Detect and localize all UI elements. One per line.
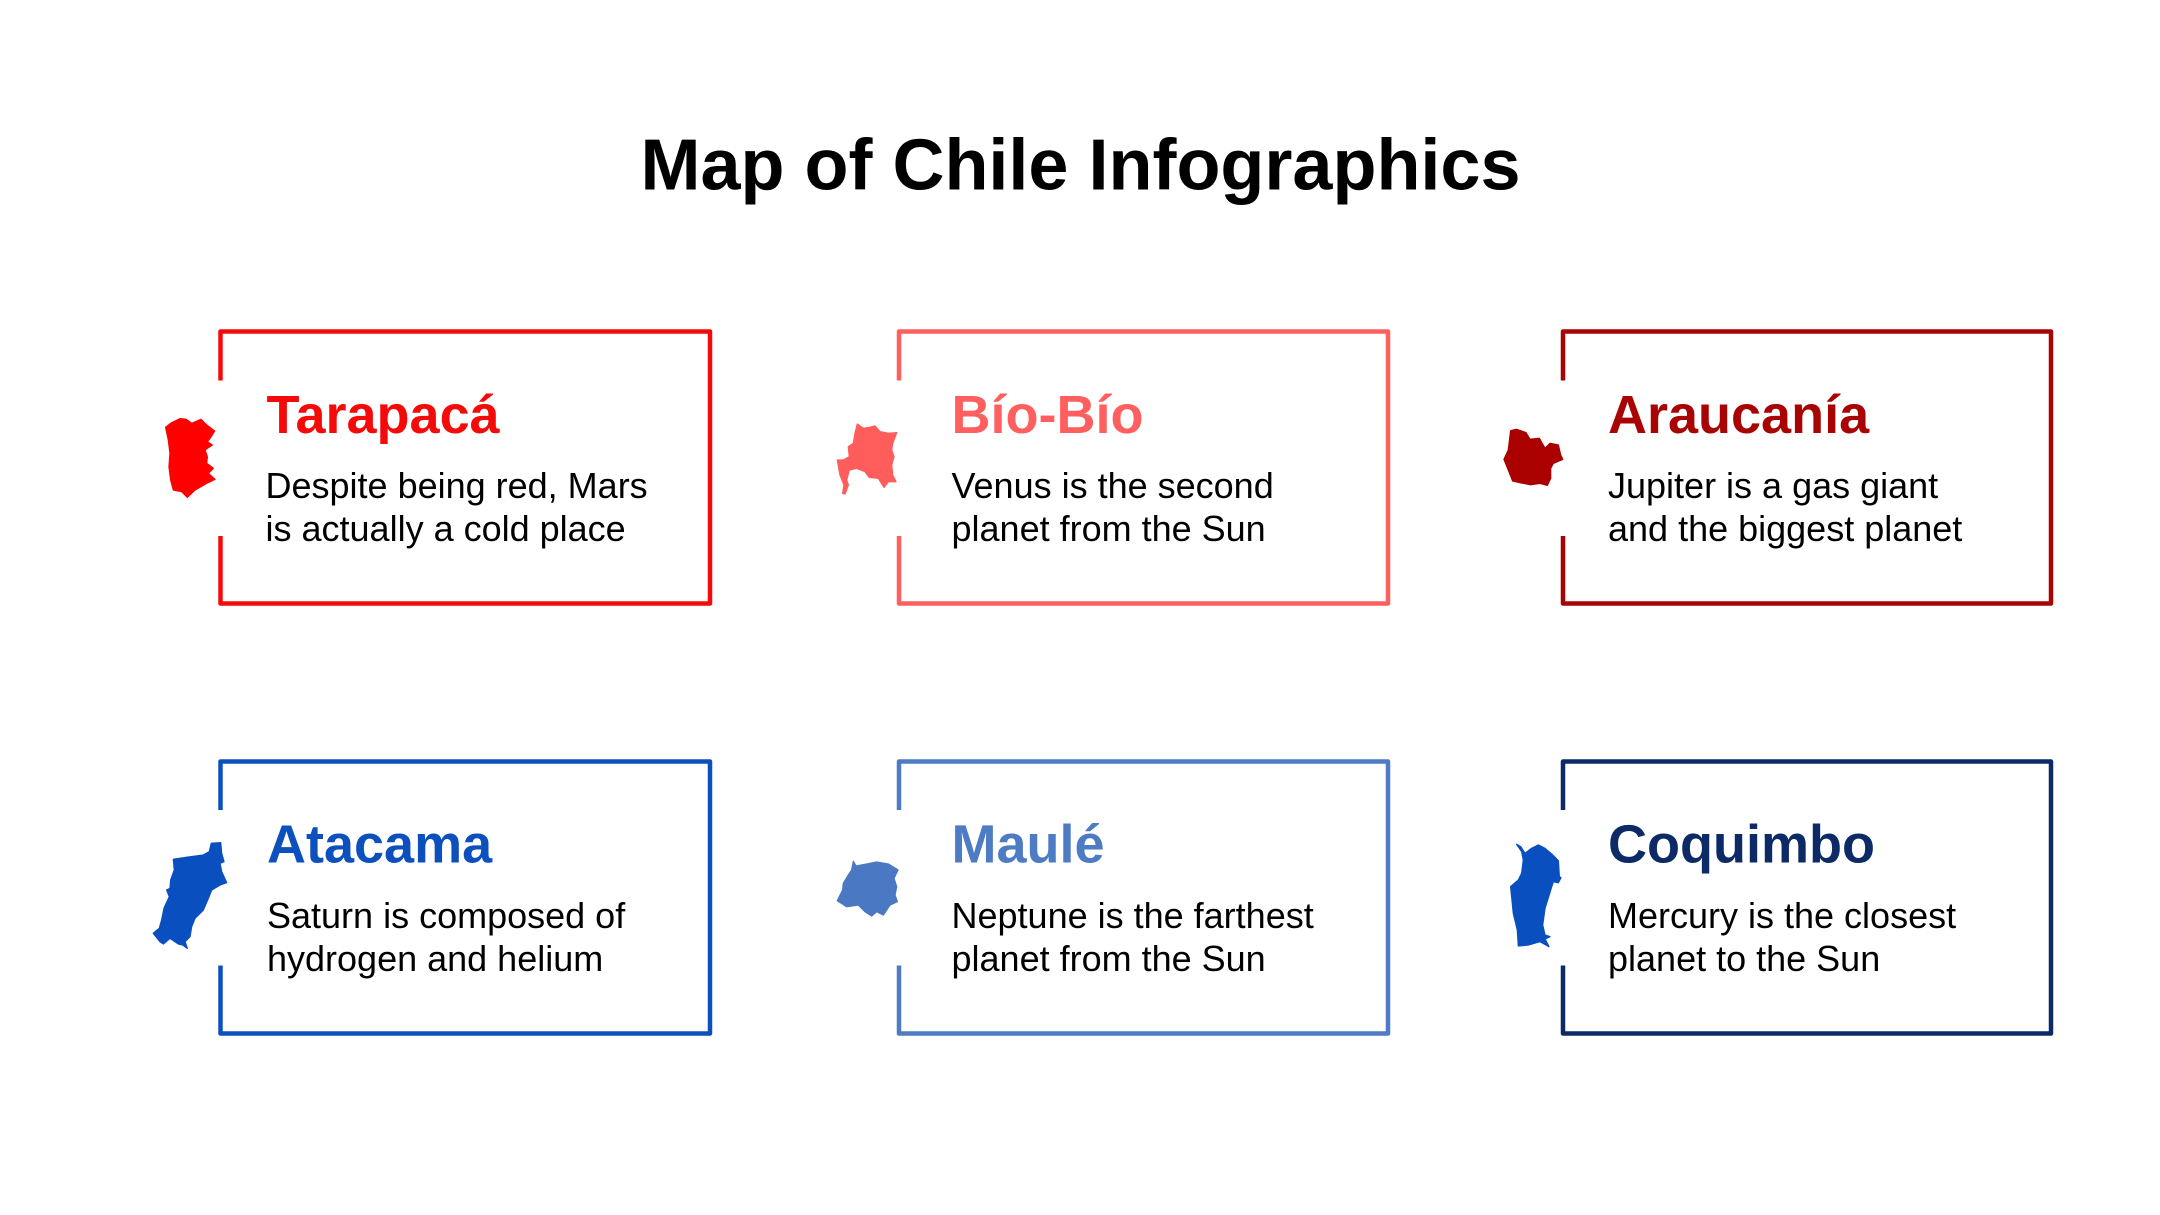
card outline xyxy=(899,332,1388,604)
body text: Saturn is composed of xyxy=(267,895,626,936)
body text line 2: planet from the Sun xyxy=(952,508,1266,549)
icon: Bío-Bío region map xyxy=(837,424,897,494)
card outline xyxy=(220,762,710,1034)
body text: Mercury is the closest xyxy=(1608,895,1956,936)
panel: Atacama xyxy=(153,762,710,1034)
body text line 2: is actually a cold place xyxy=(266,508,626,549)
heading: Araucanía xyxy=(1608,385,1870,445)
heading: Tarapacá xyxy=(266,385,501,445)
heading: Coquimbo xyxy=(1608,814,1875,874)
card outline xyxy=(220,332,710,604)
panel: Bío-Bío xyxy=(837,332,1388,604)
body text: Venus is the second xyxy=(952,465,1274,506)
body text line 2: planet to the Sun xyxy=(1608,938,1880,979)
body text: Neptune is the farthest xyxy=(952,895,1314,936)
card outline xyxy=(1563,762,2051,1034)
icon: Maulé region map xyxy=(837,861,898,916)
body text: Jupiter is a gas giant xyxy=(1608,465,1938,506)
panel: Maulé xyxy=(837,762,1388,1034)
icon: Coquimbo region map xyxy=(1511,844,1561,947)
card outline xyxy=(899,762,1388,1034)
panel: Coquimbo xyxy=(1511,762,2051,1034)
icon: Tarapacá region map xyxy=(166,419,215,497)
heading: Bío-Bío xyxy=(952,385,1143,445)
heading: Atacama xyxy=(267,814,493,874)
card outline xyxy=(1563,332,2051,604)
body text line 2: hydrogen and helium xyxy=(267,938,603,979)
icon: Atacama region map xyxy=(153,843,227,948)
body text line 2: and the biggest planet xyxy=(1608,508,1962,549)
title: Map of Chile Infographics xyxy=(640,126,1521,206)
panel: Tarapacá xyxy=(166,332,710,604)
icon: Araucanía region map xyxy=(1504,429,1563,485)
panel: Araucanía xyxy=(1504,332,2051,604)
body text line 2: planet from the Sun xyxy=(952,938,1266,979)
heading: Maulé xyxy=(952,814,1105,874)
body text: Despite being red, Mars xyxy=(266,465,648,506)
